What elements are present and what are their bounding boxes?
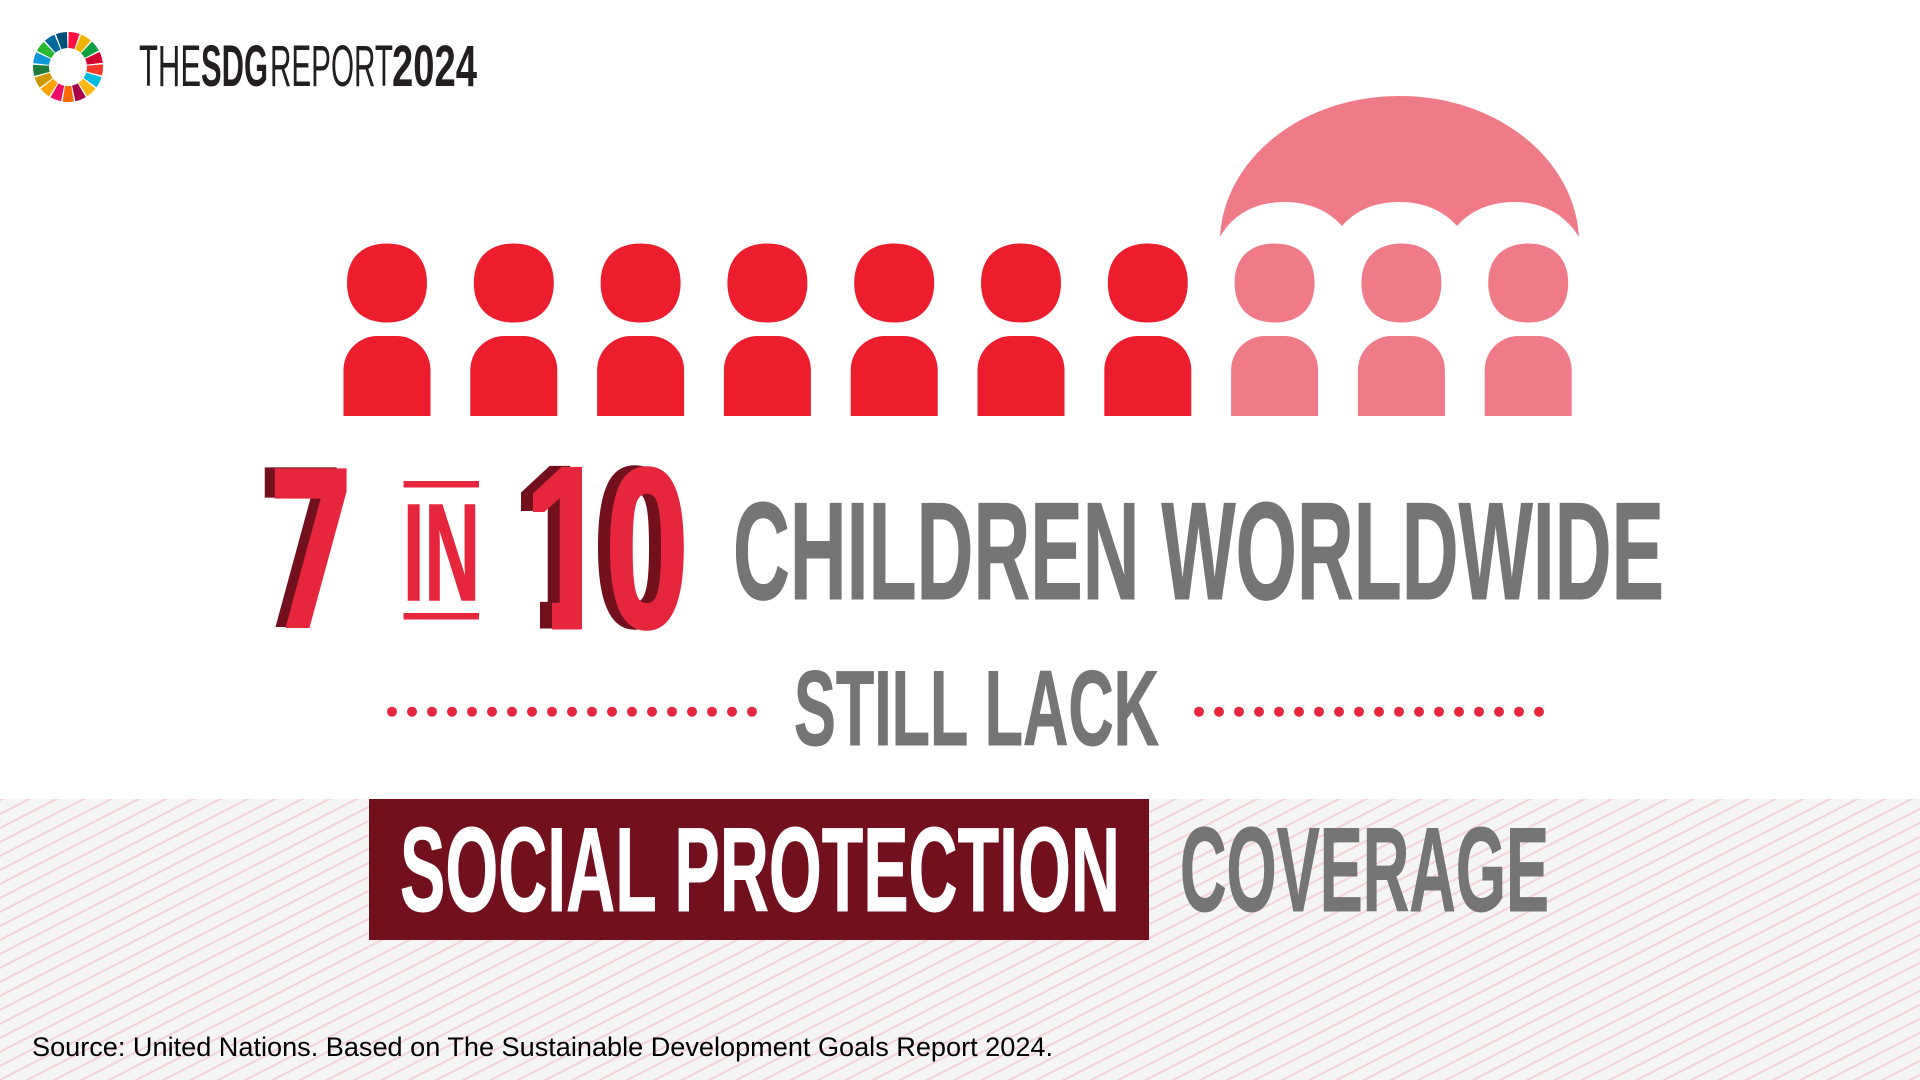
child 4 — [724, 244, 811, 416]
source note: Source: United Nations. Based on The Sustainable Development Goals Report 2024. — [32, 1032, 1053, 1062]
big number: 10: 1 — [523, 419, 613, 678]
child 5 — [851, 244, 938, 416]
word: IN with rules: IN — [403, 476, 480, 630]
heading: coverage: COVERAGE — [1180, 803, 1549, 937]
dotted rule left — [387, 707, 757, 717]
big number: 10: 0 — [605, 422, 689, 676]
child 6 — [978, 244, 1064, 416]
big number: 10 — [521, 465, 684, 631]
child 10 — [1485, 244, 1572, 416]
big number: 10: 1 — [511, 418, 601, 677]
logo wordmark: REPORT — [270, 34, 393, 99]
icon: row of ten children — [344, 244, 1572, 416]
child 7 — [1104, 244, 1191, 416]
big number: 10: 0 — [593, 421, 677, 675]
big number: 7 — [256, 424, 357, 680]
logo wordmark — [139, 34, 477, 99]
highlight box: social protection: SOCIAL PROTECTION — [400, 803, 1120, 937]
icon: SDG colour wheel logo — [30, 29, 106, 105]
child 2 — [470, 244, 557, 416]
big number: 7: 7 — [256, 424, 347, 679]
heading: still lack: STILL LACK — [794, 648, 1159, 768]
child 3 — [597, 244, 684, 416]
highlight box: social protection — [369, 799, 1149, 940]
child 9 — [1358, 244, 1445, 416]
word: IN with rules — [403, 476, 480, 630]
icon: umbrella — [1220, 96, 1579, 237]
big number: 7: 7 — [266, 425, 357, 680]
striped background band — [0, 799, 1920, 1080]
dotted rule right — [1194, 707, 1544, 717]
child 8 — [1231, 244, 1318, 416]
logo wordmark: 2024 — [392, 34, 477, 99]
logo wordmark: THE — [139, 34, 201, 99]
child 1 — [344, 244, 430, 416]
logo wordmark: SDG — [201, 34, 268, 99]
